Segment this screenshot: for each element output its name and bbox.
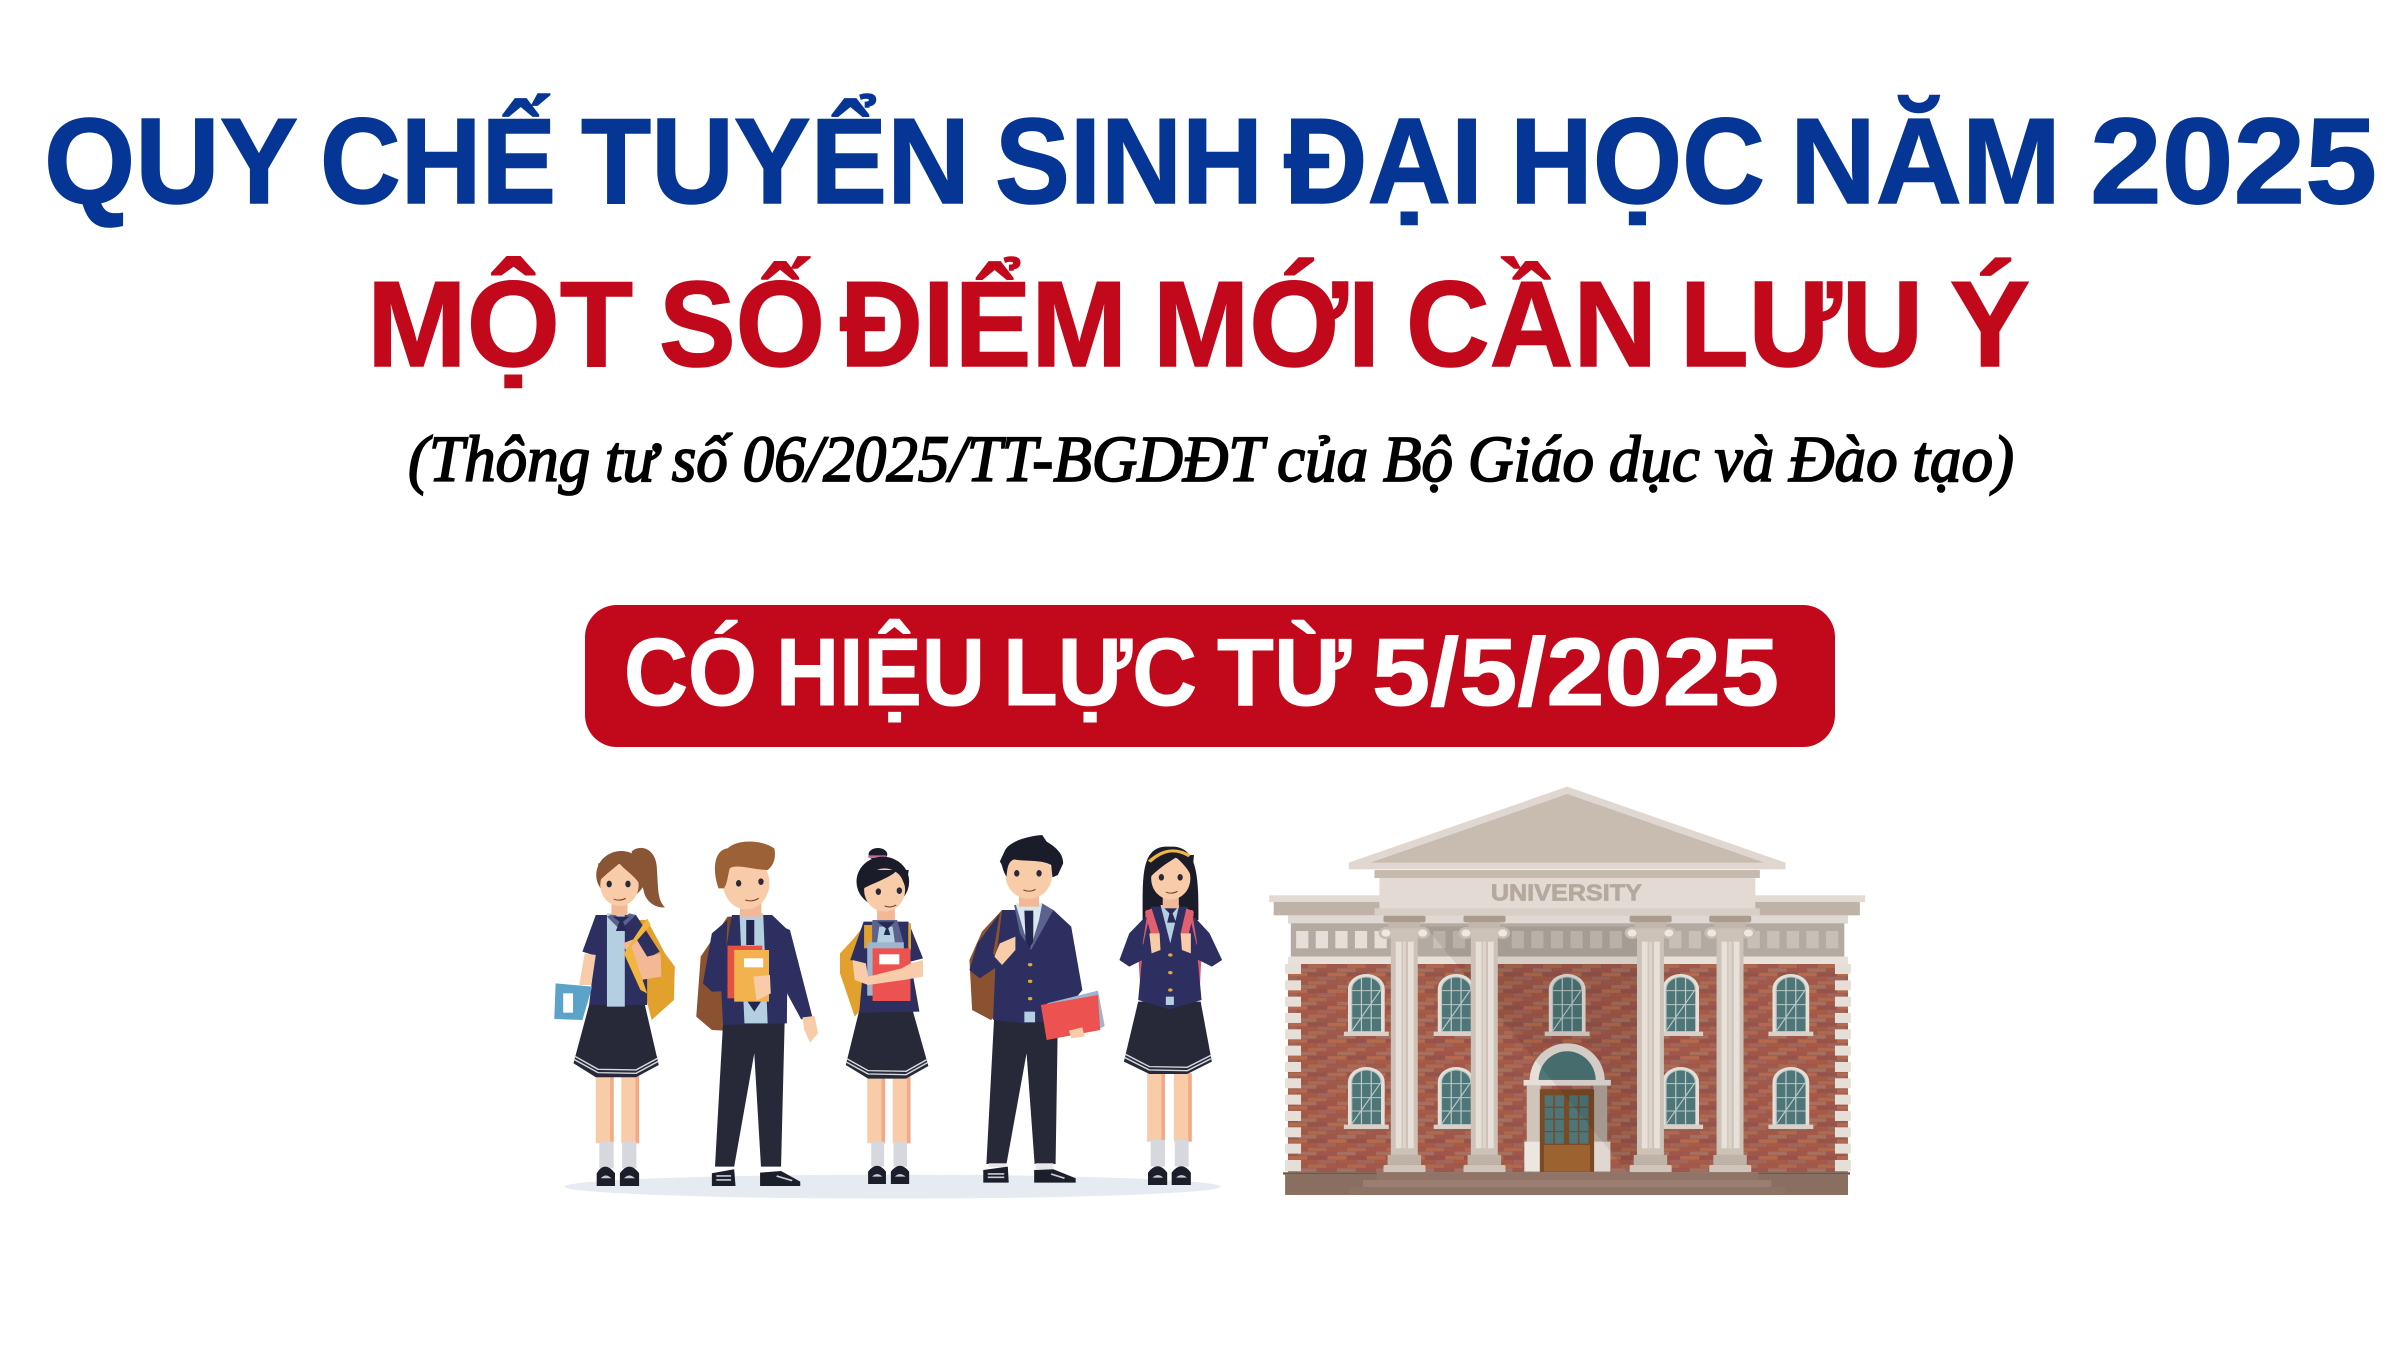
cast shadow bbox=[1426, 927, 1662, 1172]
badge: effective date: LỰC bbox=[1003, 619, 1197, 726]
student 2: boy with orange book bbox=[696, 841, 818, 1186]
badge: effective date: 5/5/2025 bbox=[1372, 619, 1779, 726]
subtitle: legal reference: (Thông tư số 06/2025/TT-BGDĐT của Bộ Giáo dục và Đào tạo) bbox=[408, 423, 2014, 496]
title: line one: HỌC bbox=[1510, 93, 1765, 229]
title: line one bbox=[44, 93, 2377, 229]
ground shadow bbox=[565, 1175, 1221, 1199]
title: line one: CHẾ bbox=[320, 93, 556, 229]
title: line two: ĐIỂM bbox=[840, 256, 1127, 392]
student 4: boy with red book bbox=[969, 835, 1105, 1183]
title: line two: SỐ bbox=[659, 256, 825, 392]
student 5: girl with headband bbox=[1119, 847, 1222, 1185]
student 3: girl with hair bun bbox=[840, 848, 928, 1184]
title: line two: Ý bbox=[1950, 256, 2030, 392]
front steps bbox=[1283, 1172, 1850, 1195]
badge: effective date: HIỆU bbox=[776, 618, 985, 726]
title: line two: MỘT bbox=[367, 256, 633, 392]
columns bbox=[1379, 916, 1756, 1172]
title: line one: QUY bbox=[44, 93, 298, 229]
title: line two: MỚI bbox=[1153, 256, 1380, 392]
illustration: group of students bbox=[554, 835, 1222, 1199]
building sign: UNIVERSITY bbox=[1491, 881, 1642, 906]
title: line two bbox=[367, 256, 2030, 392]
title: line two: CẦN bbox=[1406, 256, 1657, 392]
stone quoins bbox=[1285, 964, 1851, 1171]
title: line one: SINH bbox=[995, 93, 1263, 229]
student 1: girl with ponytail bbox=[554, 848, 675, 1186]
title: line one: NĂM bbox=[1790, 93, 2061, 229]
badge: effective date: TỪ bbox=[1217, 619, 1351, 726]
entrance door bbox=[1523, 1043, 1611, 1172]
badge: effective date bbox=[585, 605, 1835, 747]
title: line one: TUYỂN bbox=[581, 93, 970, 229]
side roof cornice bbox=[1269, 895, 1865, 902]
title: line one: ĐẠI bbox=[1284, 93, 1483, 229]
windows bbox=[1344, 974, 1813, 1129]
illustration: university building bbox=[1269, 787, 1865, 1195]
title: line one: 2025 bbox=[2090, 93, 2377, 229]
entablature band bbox=[1288, 915, 1848, 964]
pediment bbox=[1349, 787, 1786, 916]
badge: effective date: CÓ bbox=[624, 619, 757, 726]
brick wall bbox=[1288, 964, 1848, 1172]
title: line two: LƯU bbox=[1680, 256, 1923, 392]
